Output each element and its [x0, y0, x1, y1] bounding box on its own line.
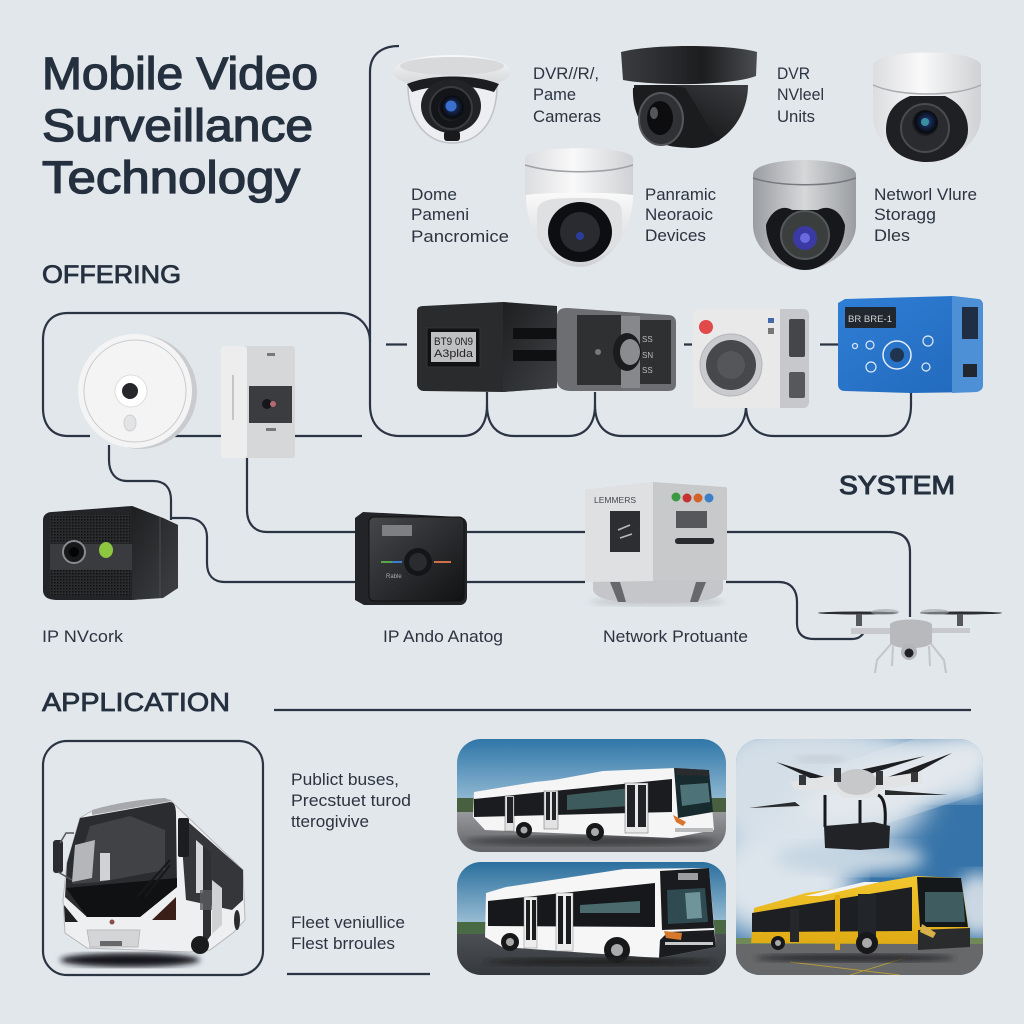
icon: silver dome camera: [525, 148, 633, 267]
heading: system: SYSTEM: [839, 470, 955, 500]
camera labels: Dles: [874, 227, 910, 245]
icon: black recorder box with display: [417, 302, 557, 392]
icon: white dial unit: [693, 309, 809, 408]
icon: grey module with lens: SS: [642, 335, 653, 344]
heading: application: APPLICATION: [42, 687, 230, 717]
camera labels: Pameni: [411, 206, 469, 224]
camera labels: Devices: [645, 227, 706, 245]
application text: public buses: Precstuet turod: [291, 792, 411, 810]
title: Mobile Video: [42, 48, 318, 99]
system labels: IP NVcork: [42, 628, 124, 646]
icon: grey dome camera: [753, 160, 856, 270]
icon: round white sensor: [78, 334, 197, 449]
icon: grey network appliance: [585, 482, 727, 606]
photo: white bus on road: [457, 739, 726, 852]
icon: quadcopter drone: [818, 609, 1002, 673]
application text: fleet: Flest brroules: [291, 935, 395, 953]
application text: public buses: tterogivive: [291, 813, 369, 831]
icon: grey module with lens: SS: [642, 366, 653, 375]
camera labels: Panramic: [645, 186, 716, 204]
photo: white city bus: [457, 862, 726, 975]
icon: grey module with lens: SN: [642, 351, 653, 360]
camera labels: Pancromice: [411, 228, 509, 246]
icon: grey network appliance: LEMMERS: [594, 495, 636, 505]
application text: public buses: [291, 771, 411, 831]
icon: blue control unit: [838, 296, 983, 393]
camera labels: Networl Vlure: [874, 186, 977, 204]
icon: clear dome camera: [393, 55, 511, 143]
application text: public buses: Publict buses,: [291, 771, 399, 789]
camera labels: [411, 65, 977, 246]
title: [42, 48, 318, 203]
camera labels: DVR//R/,: [533, 65, 599, 83]
title: Surveillance: [42, 100, 313, 151]
system labels: [42, 628, 748, 646]
photo: drone over yellow bus: [736, 739, 983, 975]
camera labels: Units: [777, 108, 815, 126]
title: Technology: [42, 152, 301, 203]
system labels: IP Ando Anatog: [383, 628, 503, 646]
application text: fleet: Fleet veniullice: [291, 914, 405, 932]
camera labels: Storagg: [874, 206, 936, 224]
icon: white turret camera: [873, 52, 981, 162]
panel: front bus: [43, 741, 263, 975]
icon: black dome camera: [621, 46, 757, 148]
camera labels: Neoraoic: [645, 206, 713, 224]
icon: black recorder box with display: A3plda: [434, 348, 474, 360]
system labels: Network Protuante: [603, 628, 748, 646]
icon: grey module with lens: [557, 308, 676, 391]
camera labels: DVR: [777, 65, 810, 83]
icon: blue control unit: BR BRE-1: [848, 314, 892, 324]
icon: white wall box: [221, 346, 295, 458]
application text: fleet: [291, 914, 405, 953]
heading: offering: OFFERING: [42, 261, 181, 289]
camera labels: Cameras: [533, 108, 601, 126]
icon: black recorder box with display: BT9 0N9: [434, 336, 473, 348]
icon: dark control box: Rable: [386, 574, 402, 580]
icon: black camera box: [43, 506, 178, 600]
icon: dark control box: [355, 512, 467, 605]
camera labels: Dome: [411, 186, 457, 204]
camera labels: NVleel: [777, 86, 824, 104]
camera labels: Pame: [533, 86, 576, 104]
